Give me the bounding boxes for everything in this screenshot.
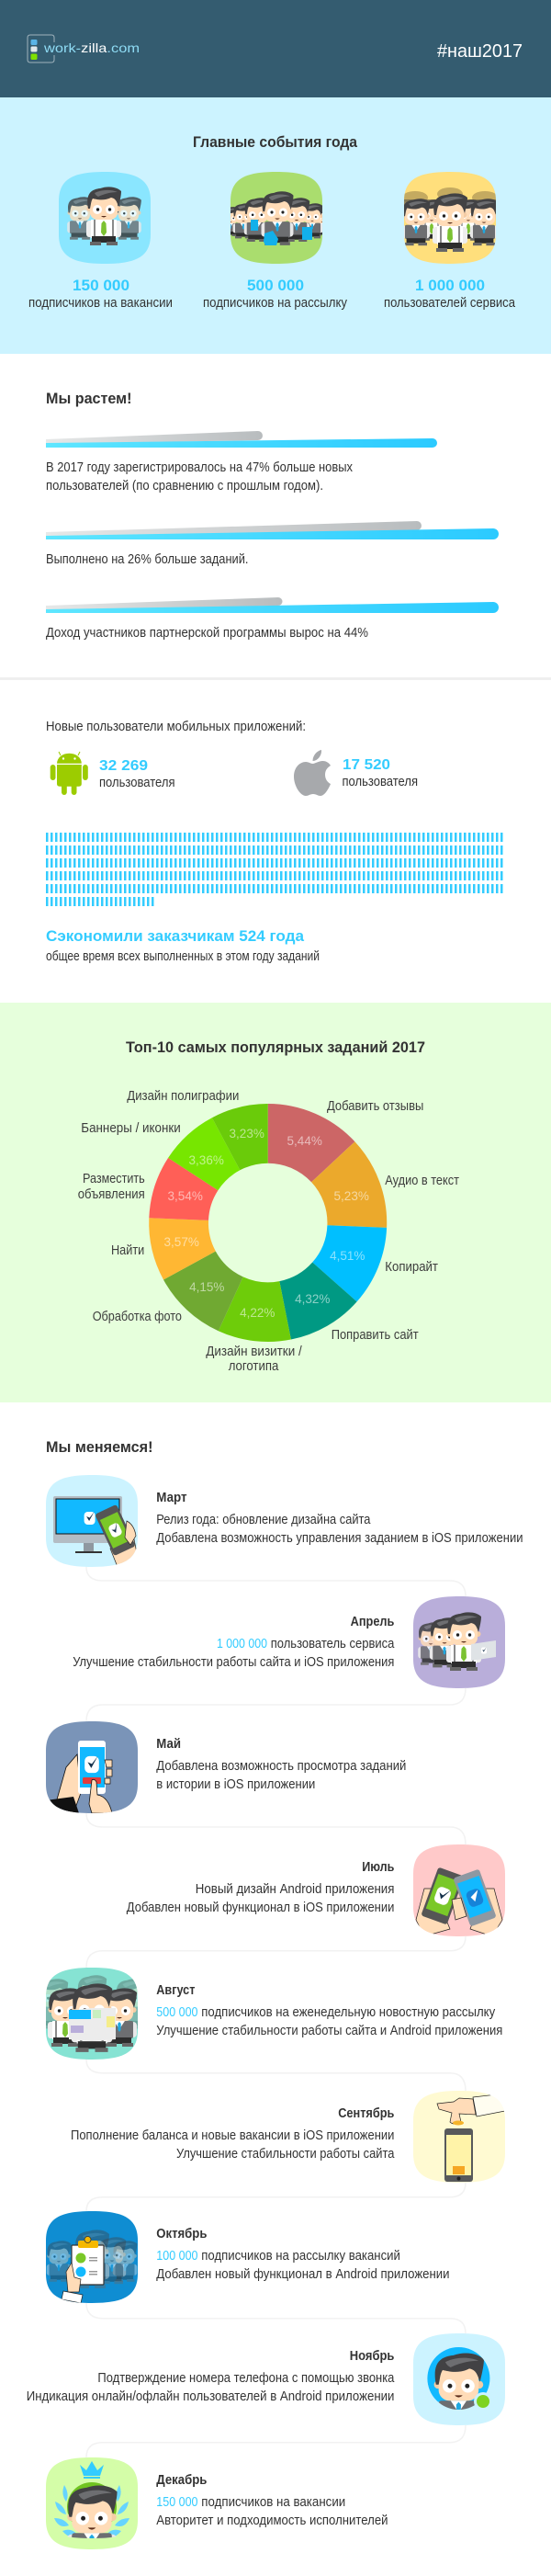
text: tasks: Выполнено на 26% больше заданий. bbox=[46, 552, 248, 567]
text: September: Улучшение стабильности работы сайта bbox=[176, 2147, 395, 2162]
callout: saved years: Сэкономили заказчикам 524 года bbox=[46, 927, 305, 945]
icon: August, men with newspaper bbox=[46, 1968, 138, 2060]
stat: ios: 17 520 bbox=[343, 757, 390, 773]
donut labels: Дизайн полиграфии bbox=[127, 1089, 239, 1104]
donut labels: Аудио в текст bbox=[385, 1174, 459, 1188]
text: October bbox=[156, 2227, 450, 2282]
logo bbox=[28, 35, 140, 62]
icon: May, hand with phone bbox=[46, 1721, 138, 1813]
stat: android bbox=[99, 758, 174, 790]
text: March bbox=[156, 1491, 523, 1546]
donut labels: Разместить bbox=[83, 1172, 145, 1186]
text: August: подписчиков на еженедельную новостную рассылку bbox=[201, 2005, 496, 2020]
text: July: Новый дизайн Android приложения bbox=[196, 1882, 394, 1897]
donut labels: Найти bbox=[111, 1243, 144, 1258]
text: July: Июль bbox=[362, 1860, 394, 1875]
icon: many men bbox=[402, 172, 498, 264]
stat: 150 000: 150 000 bbox=[73, 277, 129, 294]
icon: three men bbox=[59, 172, 151, 264]
callout: saved years: общее время всех выполненных в этом году заданий bbox=[46, 949, 320, 964]
text: November: Ноябрь bbox=[350, 2349, 394, 2364]
icon: December, crowned avatar bbox=[46, 2457, 138, 2549]
text: December: Декабрь bbox=[156, 2473, 207, 2488]
stat: 1 000 000 bbox=[384, 277, 516, 311]
donut labels: Баннеры / иконки bbox=[81, 1121, 181, 1136]
donut labels: логотипа bbox=[229, 1359, 279, 1374]
heading: Мы растем! bbox=[46, 390, 132, 407]
donut percentages: 5,23% bbox=[334, 1189, 369, 1203]
text: March: Релиз года: обновление дизайна сайта bbox=[156, 1513, 371, 1527]
donut percentages: 4,51% bbox=[330, 1249, 365, 1263]
logo: work- zilla .com bbox=[43, 40, 140, 55]
icon: android bbox=[51, 752, 88, 795]
timeline connectors bbox=[86, 1567, 466, 2457]
donut labels bbox=[78, 1089, 459, 1374]
text: November: Индикация онлайн/офлайн пользователей в Android приложении bbox=[27, 2389, 394, 2404]
text: December: 150 000 bbox=[156, 2495, 198, 2510]
text: September: Пополнение баланса и новые вакансии в iOS приложении bbox=[71, 2128, 394, 2143]
donut percentages: 5,44% bbox=[287, 1134, 322, 1148]
bar: tasks bbox=[46, 521, 499, 539]
text: May: Добавлена возможность просмотра заданий bbox=[156, 1759, 406, 1774]
icon: apple bbox=[294, 750, 331, 796]
donut labels: объявления bbox=[78, 1187, 145, 1202]
donut percentages: 3,36% bbox=[189, 1153, 224, 1167]
text: April bbox=[73, 1615, 395, 1670]
icon: October, clipboard bbox=[46, 2211, 138, 2303]
text: September bbox=[71, 2106, 395, 2162]
text: October: подписчиков на рассылку вакансий bbox=[201, 2249, 400, 2264]
text: May: Май bbox=[156, 1737, 181, 1752]
donut percentages: 3,54% bbox=[168, 1189, 203, 1203]
icon: crowd of men bbox=[231, 172, 322, 264]
donut percentages: 3,57% bbox=[164, 1235, 199, 1249]
header band bbox=[0, 0, 551, 97]
donut labels: Поправить сайт bbox=[332, 1328, 419, 1343]
panel: top 10 tasks bbox=[0, 1003, 551, 1402]
stat: ios bbox=[342, 757, 418, 789]
text: November: Подтверждение номера телефона с помощью звонка bbox=[97, 2371, 395, 2386]
stat: android: 32 269 bbox=[99, 758, 148, 774]
text: December: подписчиков на вакансии bbox=[201, 2495, 345, 2510]
stat: 500 000: подписчиков на рассылку bbox=[203, 296, 348, 311]
donut labels: Добавить отзывы bbox=[327, 1099, 423, 1114]
bar: affiliates bbox=[46, 597, 499, 613]
text: October: 100 000 bbox=[156, 2249, 198, 2264]
text: new users bbox=[46, 460, 354, 494]
text: August: 500 000 bbox=[156, 2005, 198, 2020]
text: October: Добавлен новый функционал в Android приложении bbox=[156, 2267, 450, 2282]
icon: April, team with laptop bbox=[413, 1596, 505, 1688]
hashtag: #наш2017 bbox=[437, 41, 523, 62]
text: May bbox=[156, 1737, 406, 1792]
donut percentages: 4,32% bbox=[295, 1292, 330, 1306]
stat: ios: пользователя bbox=[342, 775, 418, 789]
stat: 150 000: подписчиков на вакансии bbox=[28, 296, 173, 311]
heading: Мы меняемся! bbox=[46, 1438, 152, 1456]
text: affiliates: Доход участников партнерской программы вырос на 44% bbox=[46, 626, 368, 641]
heading: Топ-10 самых популярных заданий 2017 bbox=[126, 1038, 425, 1056]
donut labels: Копирайт bbox=[385, 1260, 438, 1275]
donut labels: Дизайн визитки / bbox=[206, 1345, 303, 1359]
chart: 524 years tick bars bbox=[46, 837, 503, 902]
heading: Главные события года bbox=[193, 133, 358, 151]
stat: 1 000 000: 1 000 000 bbox=[415, 277, 485, 294]
donut percentages bbox=[164, 1127, 369, 1320]
text: mobile heading: Новые пользователи мобильных приложений: bbox=[46, 720, 306, 734]
text: July bbox=[127, 1860, 394, 1915]
text: December: Авторитет и подходимость исполнителей bbox=[156, 2514, 388, 2528]
text: December bbox=[156, 2473, 388, 2528]
donut labels: Обработка фото bbox=[93, 1310, 182, 1324]
text: April: Апрель bbox=[351, 1615, 394, 1629]
text: August bbox=[156, 1983, 502, 2038]
text: August: Август bbox=[156, 1983, 195, 1998]
icon: July, two phones bbox=[413, 1844, 505, 1936]
text: November bbox=[27, 2349, 395, 2404]
stat: 1 000 000: пользователей сервиса bbox=[384, 296, 516, 311]
icon: March, monitor and phone bbox=[46, 1475, 138, 1567]
text: April: 1 000 000 bbox=[217, 1637, 267, 1651]
text: April: Улучшение стабильности работы сайта и iOS приложения bbox=[73, 1655, 394, 1670]
text: October: Октябрь bbox=[156, 2227, 207, 2241]
panel: we are changing bbox=[27, 1438, 523, 2570]
donut percentages: 3,23% bbox=[230, 1127, 264, 1140]
icon: November, online avatar bbox=[413, 2333, 505, 2425]
text: March: Март bbox=[156, 1491, 187, 1505]
donut percentages: 4,15% bbox=[189, 1280, 224, 1294]
text: new users: пользователей (по сравнению с прошлым годом). bbox=[46, 479, 323, 494]
icon: September, coin and phone bbox=[413, 2091, 505, 2183]
text: July: Добавлен новый функционал в iOS приложении bbox=[127, 1901, 394, 1915]
callout: saved years bbox=[46, 927, 320, 964]
text: April: пользователь сервиса bbox=[271, 1637, 395, 1651]
donut percentages: 4,22% bbox=[240, 1306, 275, 1320]
text: new users: В 2017 году зарегистрировалось на 47% больше новых bbox=[46, 460, 354, 475]
stat: android: пользователя bbox=[99, 776, 174, 790]
stat: 500 000 bbox=[203, 277, 348, 311]
bar: new users bbox=[46, 431, 437, 448]
panel: mobile app users bbox=[46, 720, 503, 964]
text: August: Улучшение стабильности работы сайта и Android приложения bbox=[156, 2024, 502, 2038]
donut chart bbox=[149, 1104, 387, 1342]
panel: main events of the year bbox=[0, 97, 551, 354]
stat: 150 000 bbox=[28, 277, 173, 311]
text: September: Сентябрь bbox=[338, 2106, 394, 2121]
panel: we are growing bbox=[46, 390, 499, 641]
stat: 500 000: 500 000 bbox=[247, 277, 304, 294]
text: May: в истории в iOS приложении bbox=[156, 1777, 315, 1792]
